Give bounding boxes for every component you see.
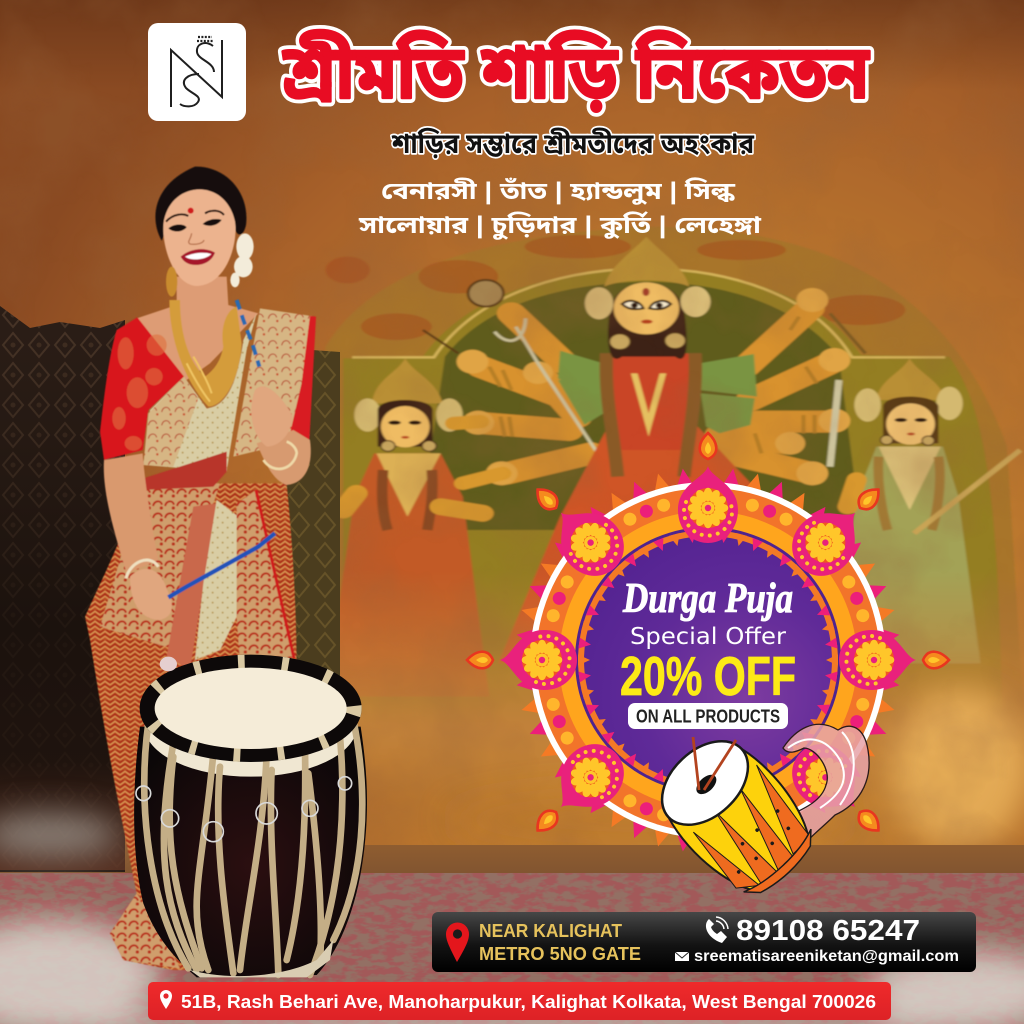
- orange triangles: [684, 765, 819, 900]
- small drum sticks: [693, 737, 736, 790]
- teeth: [185, 253, 211, 259]
- carpet: [0, 873, 1024, 1024]
- lowered hand: [130, 569, 172, 620]
- dress categories line: সালোয়ার | চুড়িদার | কুর্তি | লেহেঙ্গা: [358, 211, 762, 241]
- painting fade into the wall: [330, 570, 1024, 800]
- goddess hair: [608, 282, 687, 359]
- title: শ্রীমতি শাড়ি নিকেতন: [282, 30, 870, 114]
- icon: envelope: [675, 952, 689, 961]
- pallu left border: [143, 377, 198, 467]
- drum head: [646, 725, 764, 841]
- carved screen behind the woman: [283, 350, 340, 690]
- goddess garlands: [606, 353, 695, 477]
- drumstick lower: [168, 533, 275, 597]
- drum cords: [144, 720, 362, 975]
- purple edge: [575, 527, 841, 793]
- central goddess torso: [607, 353, 699, 450]
- goddess crown: [604, 237, 689, 287]
- white outer ring: [530, 482, 886, 838]
- saree cream pleat: [195, 500, 238, 660]
- small dhak drum icon: [642, 721, 829, 910]
- floor: [0, 845, 1024, 879]
- pallu across the chest: [143, 313, 257, 472]
- raised hand: [251, 386, 293, 447]
- heading Durga Puja: Durga Puja: [622, 576, 793, 622]
- woman playing the dhak: [85, 167, 320, 970]
- location text: NEAR KALIGHAT: [479, 921, 622, 941]
- painting of Durga on the wall: [326, 227, 1024, 730]
- icon: red location pin: [446, 922, 469, 962]
- ring dots: [531, 483, 885, 837]
- drum metal rings: [136, 777, 352, 842]
- drum rim: [147, 662, 354, 754]
- crown: [197, 37, 213, 41]
- drumstick upper: [237, 300, 259, 367]
- phone number: 89108 65247: [736, 915, 920, 947]
- screen shading: [0, 330, 125, 870]
- contact panel: [432, 912, 976, 972]
- saree red edge: [256, 490, 294, 658]
- bangle left: [126, 560, 158, 578]
- left attendant goddess: [326, 358, 503, 697]
- neck and chest: [137, 277, 258, 380]
- brows: [166, 211, 224, 222]
- drum body: [665, 746, 827, 909]
- carved wooden screen left: [0, 306, 125, 872]
- blouse gold motifs: [112, 334, 167, 451]
- right attendant goddess: [830, 358, 1020, 663]
- pill: on all products: [628, 703, 788, 729]
- floor mist: [0, 813, 1024, 1024]
- saree hem: [110, 893, 180, 968]
- top darkening: [0, 0, 1024, 90]
- goddess gold necklace: [631, 373, 666, 437]
- icon: white pin: [160, 990, 172, 1009]
- goddess green sleeves: [558, 351, 757, 433]
- lips: [181, 249, 215, 265]
- outer teeth: [473, 425, 943, 895]
- carpet motifs: [0, 873, 1024, 1024]
- goddess side fans: [585, 286, 711, 319]
- drum skin: [155, 668, 347, 749]
- bell ornament at rim: [160, 657, 177, 671]
- dhak drum: [134, 657, 367, 977]
- central goddess skirt: [498, 417, 817, 663]
- goddess face: [614, 282, 679, 334]
- drum triangle dots: [724, 808, 794, 876]
- red blouse left: [100, 317, 184, 460]
- purple centre: [584, 536, 832, 784]
- red waist fold: [140, 452, 227, 490]
- email: sreematisareeniketan@gmail.com: [694, 948, 959, 965]
- bangle right: [263, 442, 297, 469]
- drum end band: [744, 829, 822, 904]
- drum white band: [145, 677, 357, 777]
- offer badge: [467, 425, 949, 895]
- saree categories line: বেনারসী | তাঁত | হ্যান্ডলুম | সিল্ক: [381, 177, 736, 205]
- inner teeth: [550, 502, 866, 818]
- outer painted arch band: [326, 227, 1024, 730]
- necklace: [169, 300, 242, 407]
- address bar: [148, 982, 891, 1020]
- saree right panel: [237, 490, 293, 663]
- pallu shoulder border: [233, 308, 312, 457]
- Special Offer: Special Offer: [630, 624, 787, 650]
- arch trim line: [352, 268, 945, 357]
- title: শ্রীমতি শাড়ি নিকেতন: [282, 30, 870, 114]
- hair: [155, 167, 246, 241]
- yellow ring: [559, 511, 857, 809]
- flower medallions: [500, 466, 916, 828]
- rim cord beads: [147, 662, 354, 754]
- drum bottom hoop: [190, 940, 333, 977]
- inner arch shadow: [418, 282, 861, 530]
- cloth white sketch lines: [788, 732, 854, 808]
- address text: 51B, Rash Behari Ave, Manoharpukur, Kalighat Kolkata, West Bengal 700026: [181, 992, 876, 1012]
- icon: phone: [706, 917, 728, 943]
- red blouse right: [288, 316, 316, 442]
- inner olive arch: [343, 268, 1003, 730]
- nose shadow: [189, 233, 204, 244]
- pink cloth on small drum: [783, 724, 869, 850]
- flowers at ear: [230, 233, 254, 287]
- face: [163, 189, 236, 286]
- discus and trident: [423, 280, 865, 490]
- logo tile: [148, 23, 246, 121]
- necklace lower strands: [187, 357, 212, 402]
- goddess arms: [480, 308, 830, 473]
- pill: on all products: ON ALL PRODUCTS: [636, 706, 780, 726]
- goddess hands: [457, 288, 850, 485]
- bangles: [489, 317, 817, 453]
- red motifs on arch: [326, 235, 905, 340]
- location text: METRO 5NO GATE: [479, 944, 641, 964]
- saree patterned strip: [167, 503, 217, 670]
- saree skirt: [85, 483, 320, 970]
- inner teeth background: [578, 530, 838, 790]
- bindi: [188, 208, 194, 214]
- lowered arm: [104, 453, 158, 573]
- monogram: [171, 40, 222, 107]
- raised forearm: [257, 430, 311, 485]
- head black centre: [693, 771, 720, 798]
- saree waist panel: [100, 483, 220, 650]
- orange ring: [536, 488, 880, 832]
- eyes: [168, 219, 222, 231]
- warm glow on lower wall: [450, 690, 1024, 850]
- lamp flames around badge: [467, 433, 949, 836]
- goddess earrings: [609, 333, 686, 350]
- 20% OFF: 20% OFF: [620, 645, 796, 707]
- tagline: শাড়ির সম্ভারে শ্রীমতীদের অহংকার: [391, 127, 755, 159]
- goddess eyes, third eye and mouth: [622, 288, 671, 324]
- drum body: [134, 727, 367, 977]
- earring: [166, 267, 177, 297]
